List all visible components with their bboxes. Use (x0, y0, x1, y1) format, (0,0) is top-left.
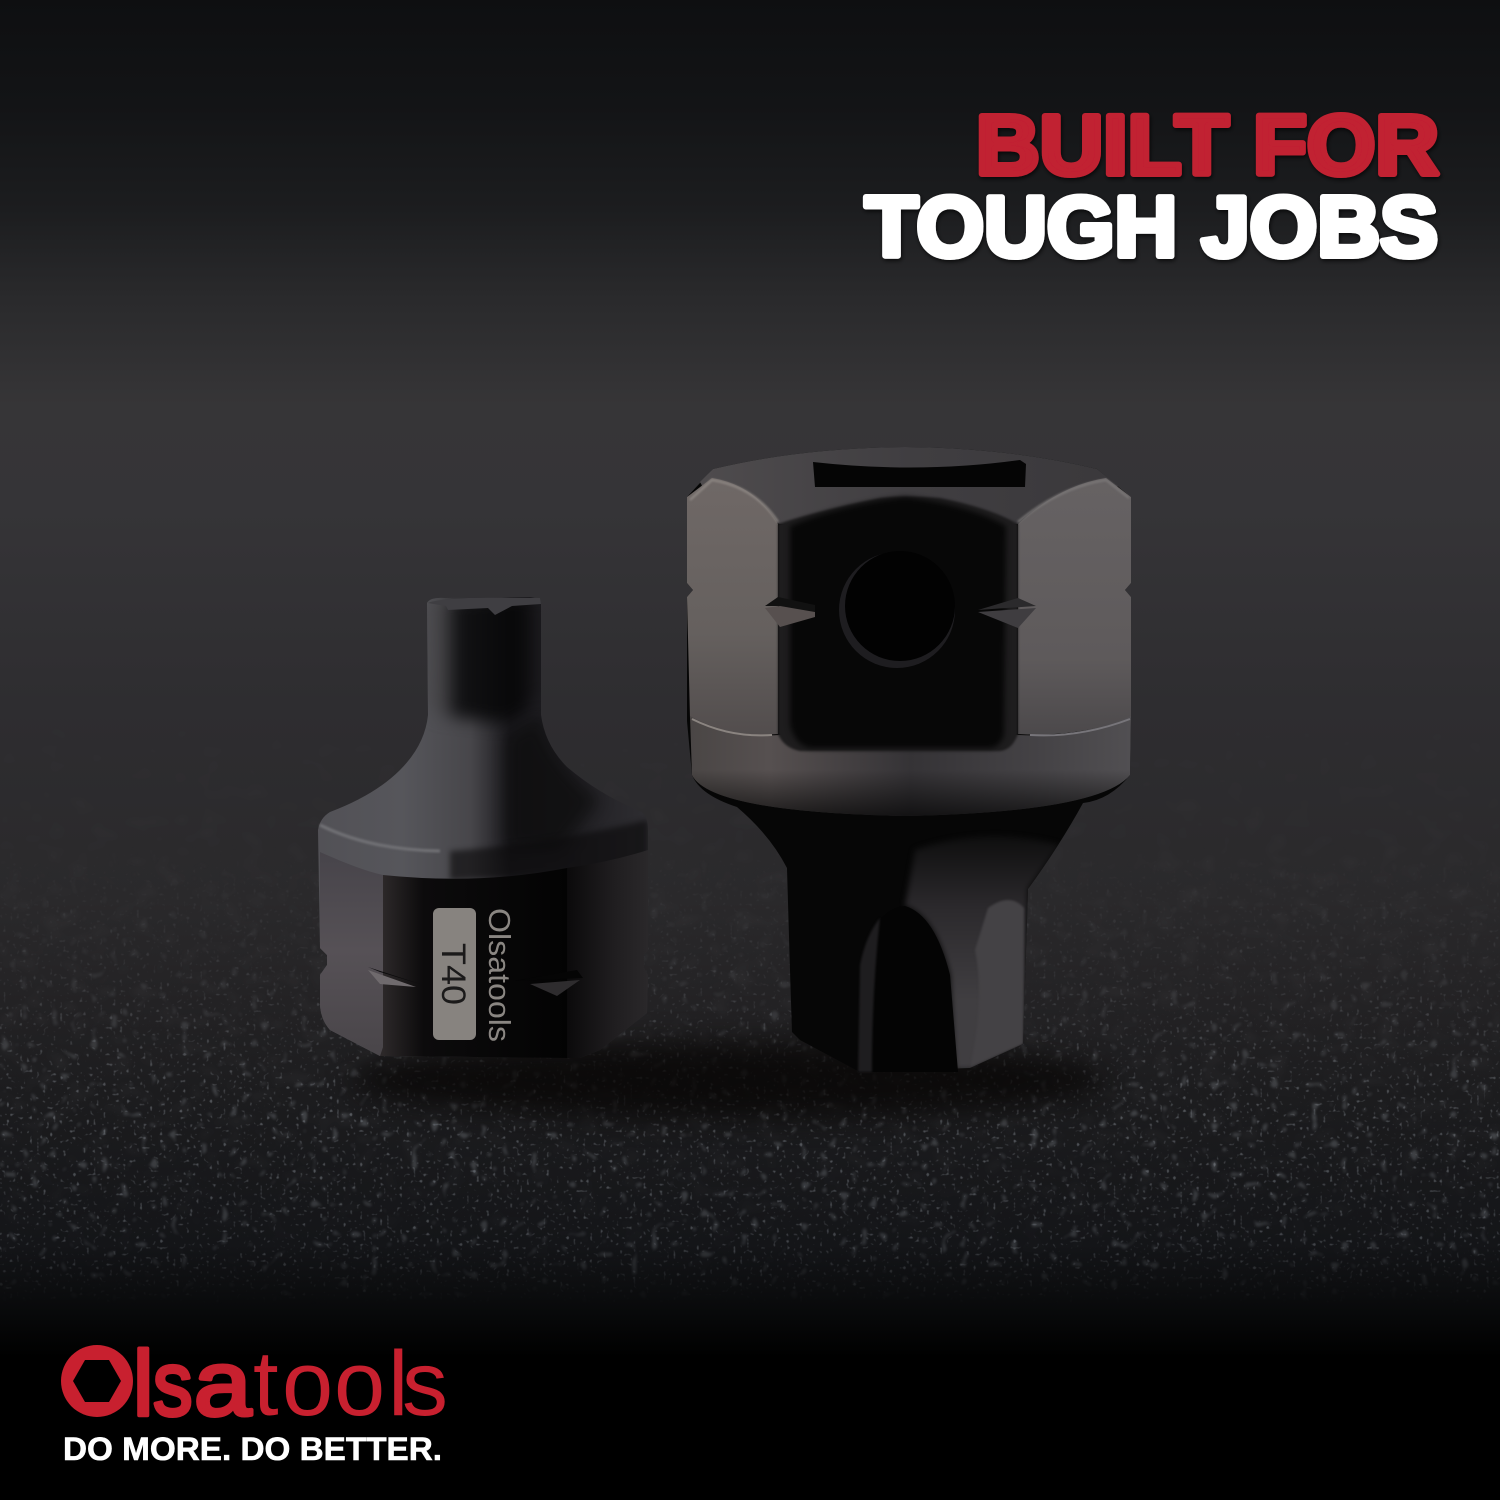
logo bold letters: l (133, 1333, 153, 1435)
collar band (690, 716, 1131, 816)
stem light flank (905, 836, 1060, 1070)
top surface (700, 447, 1118, 524)
brand logo (61, 1332, 448, 1467)
headline (865, 98, 1439, 275)
right flat (1018, 478, 1131, 735)
right edge highlight (1018, 480, 1129, 522)
torx tip top (428, 598, 541, 615)
headline line 2: TOUGH JOBS (865, 180, 1438, 275)
left groove (368, 967, 420, 987)
logo light letters: tools (253, 1333, 448, 1435)
contact shadow under tools (350, 1042, 1110, 1118)
right groove (978, 598, 1036, 628)
left collar highlight (692, 719, 772, 735)
socket silhouette (687, 447, 1131, 1072)
glittering floor texture (0, 874, 1500, 1296)
centre face (380, 868, 567, 1058)
size marking T40: T40 (434, 943, 472, 1005)
left face (320, 852, 383, 1056)
logo bold letters: s (153, 1332, 193, 1435)
tool: large socket adapter (687, 447, 1131, 1072)
torx shank (427, 597, 541, 722)
tool: small T40 bit (318, 597, 648, 1058)
logo bold letters: a (194, 1332, 252, 1435)
left flat (687, 478, 778, 735)
rim highlight (320, 825, 440, 851)
right face (567, 850, 648, 1058)
stem flat facet (970, 900, 1024, 1067)
collar lower shadow (692, 770, 1130, 816)
small bit silhouette (318, 597, 648, 1058)
size label plate (433, 908, 476, 1040)
retaining hole (839, 551, 955, 668)
slot left wall (858, 918, 880, 1072)
logo hexagon O: O (63, 1332, 131, 1431)
left groove (765, 597, 815, 627)
dark centre flat (778, 496, 1018, 751)
square drive recess (813, 460, 1026, 487)
right collar highlight (1030, 719, 1130, 735)
logo bold letters (133, 1332, 252, 1435)
ring band lower shade (450, 820, 648, 880)
tagline: DO MORE. DO BETTER. (63, 1431, 442, 1467)
right groove (513, 970, 583, 996)
headline line 1: BUILT FOR (976, 98, 1439, 192)
engraved brand name: Olsatools (482, 908, 517, 1042)
centre flat inner shade (790, 497, 1006, 748)
left edge highlight (690, 480, 778, 522)
stem black slot (858, 906, 958, 1072)
neck shadow (505, 715, 600, 850)
